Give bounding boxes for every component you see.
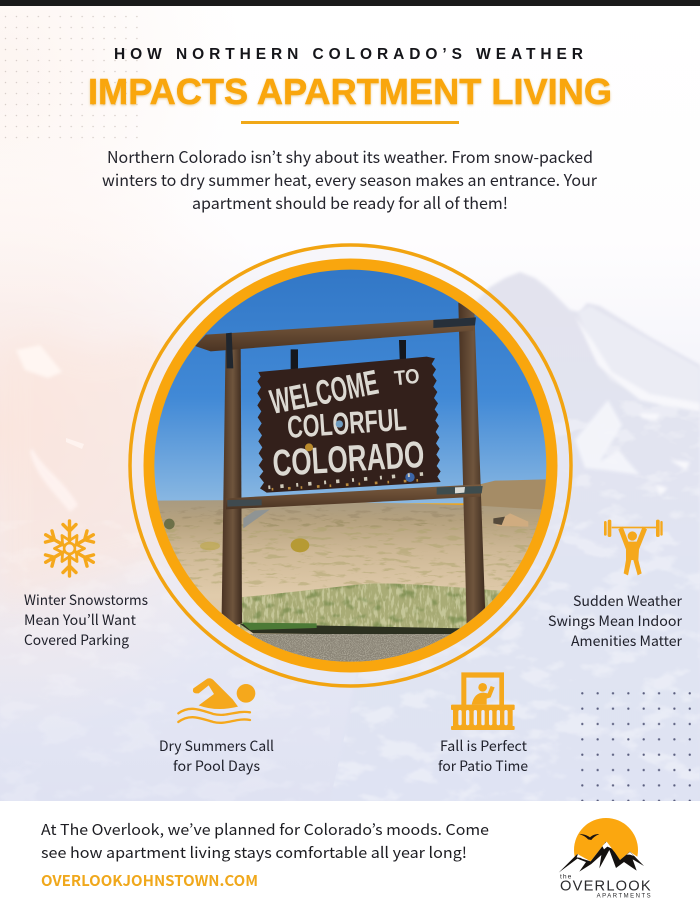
label: winter snowstorms: Mean You’ll Want [24,610,137,630]
item: dry summers [159,678,274,776]
intro text block: apartment should be ready for all of them! [192,190,508,214]
intro text block: winters to dry summer heat, every season makes an entrance. Your [102,167,598,191]
title underline [241,121,459,124]
dot pattern: bottom right [580,691,692,801]
photo hanging brackets [291,340,406,370]
logo mountains [559,842,644,873]
logo bird [579,834,599,840]
photo sky [150,267,550,503]
item: fall patio [438,672,528,776]
footer URL: OVERLOOKJOHNSTOWN.COM [41,870,258,891]
intro text block: Northern Colorado isn’t shy about its weather. From snow-packed [107,144,593,168]
sign stickers [268,420,430,489]
footer panel [41,818,650,898]
icon: swimmer [178,678,255,723]
photo grass strip [240,583,500,632]
photo left post [222,340,242,625]
item: sudden weather swings [548,520,683,651]
sign lettering: COLORADO [271,433,426,484]
photo top beam [195,317,473,351]
photo far hill [463,479,550,523]
sign lettering: TO [393,365,421,390]
label: dry summers: Dry Summers Call [159,736,274,756]
label: winter snowstorms: Covered Parking [24,630,129,650]
icon: weightlifter [604,520,663,575]
scrub texture [165,526,536,587]
label: fall patio [438,736,528,776]
logo wordmark: the [560,874,572,881]
item: winter snowstorms [24,521,148,650]
label: sudden weather swings: Swings Mean Indoor [548,611,683,631]
dot pattern: top left [3,14,139,139]
sign lettering [268,369,424,476]
icon: snowflake [42,521,97,576]
label: sudden weather swings [548,591,683,651]
label: sudden weather swings: Amenities Matter [571,631,683,651]
label: dry summers: for Pool Days [173,756,260,776]
thick ring behind photo [144,258,558,672]
heading: main title: IMPACTS APARTMENT LIVING [88,71,612,112]
footer text: At The Overlook, we’ve planned for Colorado’s moods. Come [41,819,489,840]
footer text [41,819,489,863]
photo right post [458,303,485,623]
label: dry summers [159,736,274,776]
icon: balcony [451,672,515,730]
photo lower beam [226,484,481,509]
logo wordmark [560,874,651,900]
label: fall patio: for Patio Time [438,756,528,776]
logo wordmark: OVERLOOK [560,879,651,895]
outer thin ring [130,245,571,686]
intro text block [102,144,598,214]
sign lettering: COLORFUL [286,402,408,445]
label: winter snowstorms [24,590,148,650]
label: winter snowstorms: Winter Snowstorms [24,590,148,610]
logo wordmark: APARTMENTS [597,894,651,900]
heading: eyebrow: HOW NORTHERN COLORADO’S WEATHER [114,46,587,63]
logo: The Overlook Apartments [559,818,651,900]
sign lettering: WELCOME [267,364,382,422]
label: fall patio: Fall is Perfect [440,736,528,756]
label: sudden weather swings: Sudden Weather [573,591,683,611]
footer text: see how apartment living stays comfortable all year long! [41,842,467,863]
top black bar [0,0,700,6]
photo wooden sign [257,357,441,493]
photo: Welcome to Colorful Colorado sign [150,267,550,673]
